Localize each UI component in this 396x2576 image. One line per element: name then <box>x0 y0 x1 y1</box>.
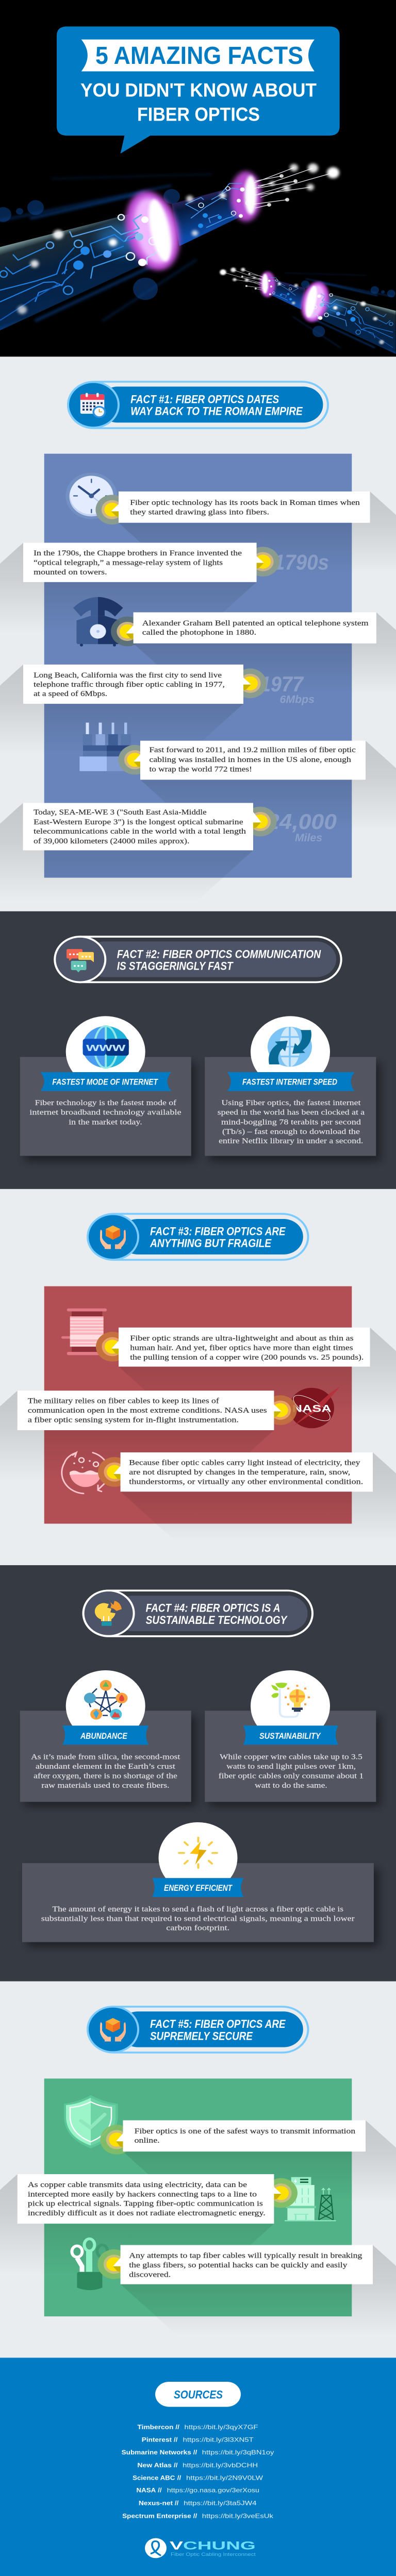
text box: SEA-ME-WE 3: Today, SEA-ME-WE 3 ("South East Asia-Middle <box>34 808 207 817</box>
text box: photophone: Alexander Graham Bell patented an optical telephone system <box>142 619 369 628</box>
card: fastest internet speed <box>205 1016 376 1156</box>
text box: military: communication open in the most extreme conditions. NASA uses <box>28 1406 267 1415</box>
text box: lightweight: human hair. And yet, fiber optics have more than eight times <box>130 1344 353 1352</box>
source list: // <box>175 2499 179 2507</box>
text box: Roman times: Fiber optic technology has its roots back in Roman times when <box>130 498 360 507</box>
source list: https://bit.ly/3veEsUk <box>202 2512 274 2519</box>
text box: copper interception: intercepted more easily by hackers connecting taps to a line to <box>28 2190 257 2198</box>
text box: 2011 <box>140 741 366 779</box>
text box: Chappe brothers: “optical telegraph,” a message-relay system of lights <box>34 558 223 567</box>
source list: https://bit.ly/2N9V0LW <box>186 2474 263 2481</box>
icon: calendar and clock <box>80 393 106 418</box>
source list: https://go.nasa.gov/3erXosu <box>167 2486 259 2494</box>
fact 5 heading text: SUPREMELY SECURE <box>150 2030 253 2043</box>
text box: Chappe brothers <box>23 543 257 582</box>
icon: hands holding box <box>100 1226 126 1249</box>
fact 2 heading text <box>117 948 321 973</box>
source list: // <box>193 2448 197 2456</box>
source list: https://bit.ly/3qyX7GF <box>184 2424 258 2431</box>
text box: military <box>18 1391 274 1430</box>
card text <box>41 1905 355 1932</box>
fact 3 heading text <box>150 1225 286 1250</box>
icon: water cycle <box>62 1453 109 1494</box>
fact 2 heading text: FACT #2: FIBER OPTICS COMMUNICATION <box>117 948 321 961</box>
text box: SEA-ME-WE 3 <box>23 803 253 850</box>
fact 5 heading <box>88 2007 308 2053</box>
icon: NASA logo: NASA <box>292 1403 332 1414</box>
ribbon: energy efficient <box>152 1878 244 1897</box>
card text: While copper wire cables take up to 3.5 <box>220 1753 362 1761</box>
fiber optic cable illustration, small <box>220 267 396 354</box>
card text: internet broadband technology available <box>29 1108 182 1116</box>
hero background <box>0 0 396 357</box>
source list: // <box>193 2512 197 2519</box>
source list: // <box>174 2461 178 2469</box>
text box: SEA-ME-WE 3: telecommunications cable in the world with a total length <box>34 827 246 836</box>
text box: photophone: called the photophone in 1880. <box>142 629 256 637</box>
fact 1 heading <box>68 382 328 428</box>
title line 3: FIBER OPTICS <box>137 104 260 125</box>
text box: Chappe brothers: In the 1790s, the Chappe brothers in France invented the <box>34 549 242 557</box>
panel: fact 5 <box>0 2078 396 2335</box>
text box: military: The military relies on fiber cables to keep its lines of <box>28 1397 220 1405</box>
icon: www globe: www <box>86 1041 126 1054</box>
logo: VCHUNG: CHUNG <box>183 2539 256 2552</box>
marker dot 2 <box>264 1395 297 1425</box>
fact 2 heading <box>55 937 341 982</box>
card text: watts to send light pulses over 1km, <box>226 1762 356 1771</box>
text box: safest: Fiber optics is one of the safest ways to transmit information <box>135 2127 356 2136</box>
fact 1 heading text: WAY BACK TO THE ROMAN EMPIRE <box>130 405 303 418</box>
text box: 2011: to wrap the world 772 times! <box>150 765 252 773</box>
text box: Long Beach: Long Beach, California was the first city to send live <box>34 671 222 680</box>
icon: five elements star <box>84 1680 128 1720</box>
fact 4 heading text: SUSTAINABLE TECHNOLOGY <box>146 1614 288 1627</box>
text box: Long Beach <box>23 665 243 704</box>
fact 3 heading text: ANYTHING BUT FRAGILE <box>150 1237 272 1250</box>
marker dot 3 <box>111 617 144 646</box>
card text: after oxygen, there is no shortage of the <box>34 1772 177 1780</box>
fact 5 heading text: FACT #5: FIBER OPTICS ARE <box>150 2018 286 2031</box>
big number: 1977 6Mbps: 6Mbps <box>279 692 315 705</box>
card text <box>219 1753 364 1790</box>
marker dot 3 <box>98 1457 131 1487</box>
card text <box>218 1099 365 1145</box>
source list <box>122 2424 274 2519</box>
source list: https://bit.ly/3vbDCHH <box>183 2461 258 2469</box>
card: fastest mode of internet <box>20 1016 191 1156</box>
section: fact 4 dark band <box>0 1565 396 1981</box>
source list: Pinterest <box>142 2436 172 2443</box>
fiber optic cable illustration, large <box>0 163 339 333</box>
source list: Science ABC <box>133 2474 175 2481</box>
icon: rotary telephone <box>73 597 123 647</box>
fact 4 heading text: FACT #4: FIBER OPTICS IS A <box>146 1602 280 1615</box>
text box: Long Beach: at a speed of 6Mbps. <box>34 690 107 698</box>
text box: Roman times: they started drawing glass into fibers. <box>130 508 269 516</box>
ribbon: fastest internet speed <box>227 1072 355 1091</box>
card text: mind-boggling 78 terabits per second <box>221 1118 361 1126</box>
marker dot 5 <box>119 745 152 775</box>
text box: SEA-ME-WE 3: East-Western Europe 3") is the longest optical submarine <box>34 818 243 826</box>
card: sustainability <box>205 1670 376 1802</box>
big number: 1977 6Mbps: 1977 <box>260 672 304 696</box>
big number: 1790s: 1790s <box>274 551 329 574</box>
logo: VCHUNG: Fiber Optic Cabling Interconnect <box>171 2552 256 2557</box>
sources heading pill <box>155 2382 241 2407</box>
card text: abundant element in the Earth’s crust <box>36 1762 176 1771</box>
big number: 1977 6Mbps <box>260 672 315 705</box>
marker dot 1 <box>95 495 128 524</box>
text box: light not electricity: thunderstorms, or virtually any other environmental condition. <box>129 1478 363 1486</box>
source list: Timbercon <box>137 2424 174 2431</box>
text box: light not electricity: Because fiber optic cables carry light instead of electricity, they <box>129 1459 360 1467</box>
icon: chat bubbles <box>67 949 94 973</box>
card text: carbon footprint. <box>166 1924 229 1932</box>
logo: VCHUNG <box>145 2538 256 2558</box>
text box: safest <box>123 2120 366 2151</box>
icon: globe with arrows <box>268 1027 312 1066</box>
fact 5 heading text <box>150 2018 286 2043</box>
text box: copper interception <box>18 2174 274 2224</box>
ribbon: fastest mode of internet <box>40 1072 171 1091</box>
text box: Roman times <box>119 492 370 523</box>
big number: 24,000 miles <box>266 810 337 844</box>
card text <box>31 1753 180 1790</box>
fact 4 heading text <box>146 1602 288 1627</box>
source list: Submarine Networks <box>122 2448 191 2456</box>
source list: https://bit.ly/3l3XN5T <box>183 2436 254 2443</box>
title speech bubble <box>57 26 340 154</box>
icon: lightning bolt <box>179 1838 217 1868</box>
source list: // <box>174 2436 178 2443</box>
big number: 24,000 miles: 24,000 <box>266 810 337 834</box>
card text: (Tb/s) – fast enough to download the <box>222 1128 360 1136</box>
panel: fact 1 timeline <box>0 454 396 902</box>
card text: Fiber technology is the fastest mode of <box>35 1099 177 1107</box>
source list: Spectrum Enterprise <box>122 2512 191 2519</box>
card text: As it’s made from silica, the second-most <box>31 1753 180 1761</box>
marker dot 3 <box>97 2249 130 2279</box>
panel: fact 3 <box>0 1286 396 1543</box>
title ribbon <box>81 40 315 71</box>
big number: 24,000 miles: Miles <box>295 831 322 844</box>
sources heading pill: SOURCES <box>174 2388 223 2401</box>
icon: clock <box>65 472 117 519</box>
card text: entire Netflix library in under a second. <box>219 1137 363 1145</box>
text box: lightweight: Fiber optic strands are ultra-lightweight and about as thin as <box>130 1334 354 1343</box>
card text: fiber optic cables only consume about 1 <box>219 1772 364 1780</box>
title line 1: 5 AMAZING FACTS <box>95 42 303 70</box>
text box: military: a fiber optic sensing system for in-flight instrumentation. <box>28 1416 239 1424</box>
source list: NASA <box>136 2486 156 2494</box>
text box: copper interception: As copper cable transmits data using electricity, data can be <box>28 2181 247 2189</box>
source list: https://bit.ly/3qBN1oy <box>202 2448 274 2456</box>
logo: VCHUNG: V <box>170 2539 183 2552</box>
text box: copper interception: pick up electrical signals. Tapping fiber-optic communication is <box>28 2199 263 2208</box>
title line 2: YOU DIDN'T KNOW ABOUT <box>80 80 317 101</box>
card: abundance <box>20 1670 191 1802</box>
card: energy efficient <box>22 1822 374 1942</box>
icon: fiber tap plugs <box>72 2239 107 2290</box>
fact 1 heading text <box>130 393 303 418</box>
text box: lightweight: the pulling tension of a copper wire (200 pounds vs. 25 pounds). <box>130 1353 364 1362</box>
source list: https://bit.ly/3ta5JW4 <box>184 2499 257 2507</box>
card text: in the market today. <box>69 1118 142 1126</box>
text box: safest: online. <box>135 2137 160 2145</box>
icon: puzzle light bulb <box>95 1601 122 1626</box>
icon: shield with check <box>64 2095 118 2148</box>
text box: tapping attempts: the glass fibers, so potential hacks can be quickly and easily <box>129 2261 348 2269</box>
card text: speed in the world has been clocked at a <box>218 1108 365 1116</box>
section: fact 2 dark band <box>0 911 396 1189</box>
fact 3 heading text: FACT #3: FIBER OPTICS ARE <box>150 1225 286 1238</box>
text box: 2011: Fast forward to 2011, and 19.2 million miles of fiber optic <box>150 746 356 754</box>
card text: watt to do the same. <box>255 1782 327 1790</box>
icon: fiber connector plugs <box>79 723 131 771</box>
icon: www globe <box>82 1026 129 1068</box>
icon: NASA logo <box>289 1386 340 1428</box>
marker dot 6 <box>243 807 276 836</box>
icon: eco light bulb <box>271 1683 310 1717</box>
icon: building and tower <box>285 2177 336 2222</box>
section: sources footer <box>0 2358 396 2576</box>
ribbon: abundance: ABUNDANCE <box>80 1731 128 1741</box>
card text <box>29 1099 182 1126</box>
text box: 2011: cabling was installed in homes in the US alone, enough <box>150 756 351 764</box>
ribbon: sustainability: SUSTAINABILITY <box>259 1731 321 1741</box>
marker dot 2 <box>246 547 279 577</box>
text box: tapping attempts: Any attempts to tap fiber cables will typically result in breaking <box>129 2251 362 2260</box>
ribbon: sustainability <box>243 1725 338 1745</box>
ribbon: energy efficient: ENERGY EFFICIENT <box>164 1883 233 1893</box>
card text: Using Fiber optics, the fastest internet <box>222 1099 361 1107</box>
ribbon: fastest internet speed: FASTEST INTERNET SPEED <box>242 1077 337 1087</box>
source list: // <box>175 2424 179 2431</box>
icon: hands holding box <box>100 2018 126 2042</box>
card text: substantially less than that required to send electrical signals, meaning a much lower <box>41 1914 355 1923</box>
source list: // <box>158 2486 162 2494</box>
source list: New Atlas <box>137 2461 172 2469</box>
text box: Long Beach: telephone traffic through fiber optic cabling in 1977, <box>34 681 225 689</box>
text box: SEA-ME-WE 3: of 39,000 kilometers (24000 miles approx). <box>34 837 189 845</box>
text box: Chappe brothers: mounted on towers. <box>34 568 107 577</box>
text box: photophone <box>134 612 376 643</box>
marker dot 1 <box>96 1332 129 1362</box>
text box: tapping attempts: discovered. <box>129 2270 171 2279</box>
ribbon: abundance <box>62 1725 148 1745</box>
text box: copper interception: incredibly difficult as it does not radiate electromagnetic energy. <box>28 2209 266 2217</box>
source list: // <box>177 2474 182 2481</box>
fact 1 heading text: FACT #1: FIBER OPTICS DATES <box>130 393 279 406</box>
fact 3 heading <box>88 1214 308 1260</box>
card text: The amount of energy it takes to send a flash of light across a fiber optic cable is <box>52 1905 343 1913</box>
card text: raw materials used to create fibers. <box>41 1782 170 1790</box>
source list: Nexus-net <box>139 2499 173 2507</box>
marker dot 2 <box>265 2178 298 2208</box>
text box: light not electricity: are not disrupted by changes in the temperature, rain, snow, <box>129 1468 350 1477</box>
fact 2 heading text: IS STAGGERINGLY FAST <box>117 960 234 973</box>
ribbon: fastest mode of internet: FASTEST MODE OF INTERNET <box>52 1077 158 1087</box>
text box: light not electricity <box>121 1452 373 1492</box>
marker dot 4 <box>234 669 267 698</box>
fact 4 heading <box>84 1590 312 1636</box>
marker dot 1 <box>100 2125 133 2155</box>
icon: thread spool <box>61 1309 107 1355</box>
text box: lightweight <box>119 1328 370 1367</box>
text box: tapping attempts <box>121 2245 373 2284</box>
